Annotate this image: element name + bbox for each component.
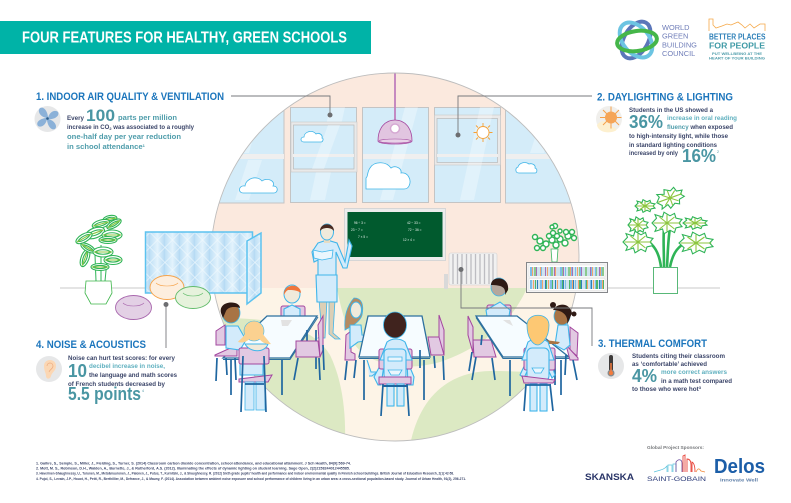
header band with title: FOUR FEATURES FOR HEALTHY, GREEN SCHOOLS — [22, 30, 347, 46]
section 2: daylighting: 36% — [629, 112, 663, 132]
chair right of center table — [428, 315, 444, 380]
logo: World Green Building Council: COUNCIL — [662, 49, 695, 58]
section 1: indoor air quality: 2 — [109, 126, 112, 131]
icon: thermometer — [598, 353, 624, 379]
section 3: thermal comfort: more correct answers — [661, 369, 728, 376]
section 4: noise and acoustics: 4 — [142, 389, 144, 393]
section 3: thermal comfort: as ‘comfortable’ achieved — [632, 361, 707, 368]
logo: Saint-Gobain — [647, 455, 706, 483]
student with long brown hair — [345, 298, 377, 380]
student with blonde pigtails and chair — [238, 321, 272, 412]
section 4: noise and acoustics: Noise can hurt test scores: for every — [68, 355, 176, 362]
center table — [359, 316, 430, 357]
floor — [215, 288, 575, 440]
section 2: daylighting: increase in oral reading — [667, 115, 737, 122]
section 3: thermal comfort: 3 — [699, 385, 702, 390]
blackboard: 7 × 5 = — [358, 235, 368, 239]
section 4: noise and acoustics — [36, 339, 178, 404]
blackboard: 72 − 36 = — [408, 228, 422, 232]
section 2: daylighting: to high-intensity light, while those — [629, 133, 729, 140]
section 3: thermal comfort: in a math test compared — [661, 378, 732, 385]
pendant lamp — [378, 74, 412, 144]
section 4: noise and acoustics: of French students decreased by — [68, 381, 166, 388]
blackboard: 23 − 7 = — [351, 228, 363, 232]
window center — [362, 107, 428, 202]
students at center table — [345, 298, 444, 416]
references: 4. Pujol, S., Levain, J.P., Houot, H., Petit, R., Berthillier, M., Defrance, J., & Mauny, F. (2014). Association between ambient noise exposure and school performance of children living in an urban area: a cross-sectional population-based study. Journal of Urban Health, 91(2), 256-271. — [36, 477, 466, 481]
blackboard: 12 × 4 = — [403, 238, 415, 242]
icon: fan — [34, 106, 60, 132]
section 2: daylighting: 2 — [717, 150, 719, 154]
section 3: thermal comfort: Students citing their classroom — [632, 353, 725, 360]
callout lines and dots — [164, 96, 592, 348]
small plant — [532, 224, 576, 262]
sponsors: Global Project Sponsors: — [647, 445, 705, 450]
logo: Delos: Delos — [714, 456, 765, 478]
section 1: indoor air quality: 1. INDOOR AIR QUALITY & VENTILATION — [36, 91, 224, 103]
logo: World Green Building Council: WORLD — [662, 23, 690, 32]
right chair at left table — [294, 316, 324, 380]
sponsors — [585, 445, 765, 483]
section 2: daylighting: fluency when exposed — [667, 124, 733, 131]
beanbag purple — [116, 296, 152, 320]
section 1: indoor air quality: parts per million — [118, 115, 177, 122]
student with blonde hair and backpack — [520, 315, 555, 411]
section 3: thermal comfort: to those who were hot — [632, 386, 697, 393]
section 2: daylighting: 16% — [682, 146, 716, 166]
section 4: noise and acoustics: 10 — [68, 361, 87, 381]
section 1: indoor air quality: one-half day per year reduction — [67, 134, 181, 141]
beanbag green — [176, 286, 210, 308]
blackboard: 42 − 33 = — [407, 221, 421, 225]
right table — [476, 316, 569, 357]
student with dark hair and chair — [215, 303, 246, 381]
section 2: daylighting: Students in the US showed a — [629, 107, 714, 114]
references: 2. Mott, M. S., Robinson, D.H., Walden, A., Burnette, J., & Rutherford, A.S. (2012). Illuminating the effects of dynamic lighting on student learning. Sage Open, 2(2)2158244012445585. — [36, 466, 350, 470]
student with pigtail buns — [545, 302, 578, 380]
circle outline — [211, 73, 579, 441]
header band with title — [0, 21, 371, 54]
logo: Better Places for People: FOR PEOPLE — [709, 42, 766, 50]
section 4: noise and acoustics: 4. NOISE & ACOUSTICS — [36, 339, 146, 351]
classroom circle — [213, 74, 578, 440]
logo: Saint-Gobain: SAINT-GOBAIN — [647, 476, 706, 483]
logo: World Green Building Council — [613, 16, 697, 64]
left chair at right table — [468, 316, 496, 380]
section 4: noise and acoustics: the language and math scores — [89, 372, 178, 379]
section 2: daylighting: in standard lighting conditions — [629, 142, 718, 149]
section 3: thermal comfort — [598, 338, 732, 393]
student with short dark hair — [486, 278, 511, 326]
blackboard: 96 ÷ 3 = — [354, 221, 366, 225]
section 1: indoor air quality: was associated to a roughly — [112, 124, 195, 131]
section 2: daylighting: 2. DAYLIGHTING & LIGHTING — [597, 92, 733, 104]
section 1: indoor air quality: 1 — [143, 143, 146, 148]
blackboard — [344, 208, 446, 260]
icon: sun — [596, 106, 622, 132]
logo: World Green Building Council: BUILDING — [662, 40, 697, 50]
section 1: indoor air quality: Every — [67, 115, 85, 122]
references: 3. Haverinen-Shaughnessy, U., Turunen, M., Metsämuuronen, J., Palonen, J., Putus, T., Kurnitski, J., & Shaughnessy, R. (2012) Sixth grade pupils’ health and performance and indoor environmental quality in Finnish school buildings. British Journal of Education Research, 2(1):42-58. — [36, 472, 454, 476]
logo: Better Places for People: HEART OF YOUR BUILDING — [709, 56, 766, 60]
floor lines — [60, 287, 720, 289]
beanbag orange — [150, 276, 184, 300]
logo: World Green Building Council: GREEN — [662, 32, 688, 40]
window left — [220, 110, 284, 204]
section 3: thermal comfort: 4% — [632, 366, 657, 386]
references: 1. Gaihre, S., Semple, S., Miller, J., Fielding, S., Turner, S. (2014) Classroom carbon dioxide concentration, school attendance, and educational attainment. J Sch Health, 84(9):569-74. — [36, 462, 351, 466]
icon: ear — [36, 356, 62, 382]
logo: Better Places for People: PUT WELLBEING AT THE — [712, 52, 763, 56]
section 1: indoor air quality: increase in CO — [67, 124, 110, 131]
large plant right — [623, 184, 713, 294]
student with dark hair and backpack — [374, 312, 414, 416]
sun in window — [474, 123, 492, 142]
section 1: indoor air quality: in school attendance — [67, 144, 137, 151]
window right — [505, 110, 570, 204]
section 4: noise and acoustics: decibel increase in noise, — [89, 363, 165, 370]
section 1: indoor air quality: 100 — [86, 107, 115, 125]
wall — [213, 74, 578, 288]
acoustic soft panel — [146, 232, 261, 304]
students at left table — [215, 285, 324, 412]
section 2: daylighting: increased by only — [629, 150, 679, 157]
section 1: indoor air quality — [34, 91, 224, 151]
student with orange hair — [281, 285, 305, 318]
window with open sash and sun — [434, 107, 500, 202]
references — [36, 462, 466, 481]
radiator — [444, 253, 497, 289]
left plant — [74, 214, 123, 304]
left table — [223, 316, 317, 358]
teacher — [312, 224, 352, 339]
section 3: thermal comfort: 3. THERMAL COMFORT — [598, 338, 707, 350]
clouds — [239, 131, 537, 193]
students at right table — [468, 278, 578, 411]
logo: Better Places for People — [709, 19, 766, 60]
window with open sash and cloud — [290, 107, 357, 202]
bookshelf — [526, 262, 608, 292]
section 2: daylighting — [596, 92, 737, 166]
section 4: noise and acoustics: 5.5 points — [68, 384, 141, 404]
logo: Skanska: SKANSKA — [585, 472, 635, 482]
logo: Delos: Innovate Well — [720, 478, 758, 482]
logo: Better Places for People: BETTER PLACES — [709, 32, 766, 42]
